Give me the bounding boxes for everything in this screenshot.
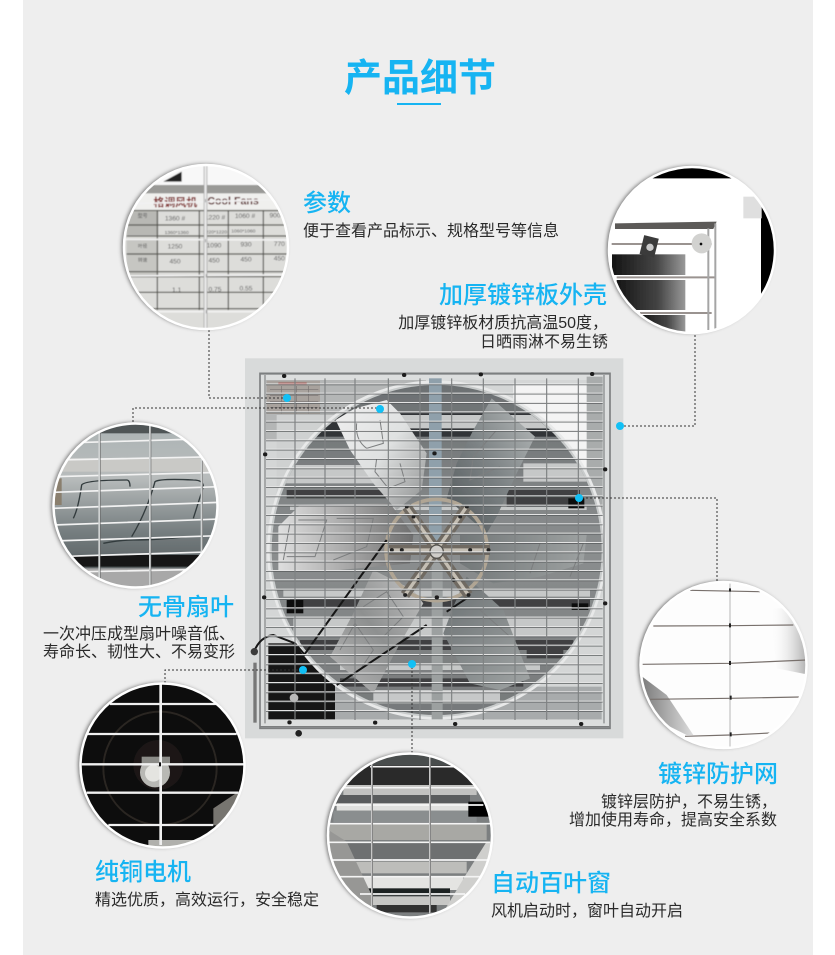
marker: motor bbox=[299, 666, 307, 674]
description: net: 镀锌层防护，不易生锈， bbox=[601, 793, 777, 811]
detail circle: blade bbox=[48, 420, 218, 590]
heading: motor: 纯铜电机 bbox=[95, 859, 191, 886]
detail circle: spec table: 1360 # bbox=[165, 215, 185, 222]
leader line: net bbox=[582, 498, 717, 582]
motor box dark corner bbox=[268, 643, 335, 719]
detail circle: spec table: 450 bbox=[208, 258, 220, 265]
detail circle: shell corner bbox=[600, 160, 780, 340]
detail circle: spec table: 叶径 bbox=[138, 242, 148, 249]
detail circle: spec table: 1090 bbox=[207, 243, 222, 250]
marker: shell bbox=[616, 422, 624, 430]
blade left bbox=[278, 503, 413, 571]
detail circle: spec table: 450 bbox=[240, 256, 252, 263]
marker: net bbox=[575, 494, 583, 502]
heading: shell: 加厚镀锌板外壳 bbox=[439, 282, 607, 309]
callout: automatic louver bbox=[320, 660, 683, 925]
leader line: shell bbox=[623, 335, 695, 426]
detail circle: spec table: 1220 # bbox=[205, 214, 225, 221]
description: blades: 一次冲压成型扇叶噪音低、 bbox=[43, 625, 235, 643]
detail circle: spec table: 1360*1360 bbox=[165, 230, 189, 236]
back louvers bbox=[270, 413, 603, 703]
marker: blades bbox=[376, 405, 384, 413]
fan outer galvanized frame bbox=[245, 358, 623, 738]
motor capacitor bbox=[290, 694, 298, 702]
detail circle: spec table: 450 bbox=[169, 258, 181, 265]
callout: galvanized shell bbox=[398, 160, 780, 430]
description: parameters: 便于查看产品标示、规格型号等信息 bbox=[303, 222, 559, 240]
detail circle: spec table: 转速 bbox=[138, 257, 148, 264]
detail circle: spec table: 1220*1220 bbox=[203, 229, 227, 235]
detail circle: spec table: 格调风机 bbox=[153, 195, 197, 209]
frame fittings bbox=[264, 374, 605, 724]
blade right bbox=[460, 535, 587, 583]
leader line: louver bbox=[411, 667, 413, 753]
callout: boneless blades bbox=[40, 405, 384, 661]
bottom frame hole bbox=[295, 730, 302, 737]
centre support bar bbox=[429, 378, 443, 719]
fan hub ring and spokes bbox=[386, 499, 490, 601]
description: motor: 精选优质，高效运行，安全稳定 bbox=[95, 891, 319, 909]
fan blades bbox=[278, 398, 587, 693]
detail circle: guard net bbox=[636, 578, 808, 750]
description: louver: 风机启动时，窗叶自动开启 bbox=[491, 902, 683, 920]
detail circle: spec table: 450 bbox=[274, 256, 285, 263]
description: shell: 加厚镀锌板材质抗高温50度， bbox=[398, 314, 608, 332]
callout: parameters bbox=[120, 160, 559, 402]
description line 2: blades: 寿命长、韧性大、不易变形 bbox=[43, 643, 235, 661]
wire grille bbox=[260, 374, 609, 727]
blade top-right bbox=[447, 398, 535, 533]
detail circle: spec table: 930 bbox=[240, 242, 252, 249]
heading: parameters: 参数 bbox=[303, 190, 351, 217]
detail circle: spec table: 1.1 bbox=[172, 287, 182, 294]
detail circle: spec table bbox=[120, 160, 290, 330]
blade bottom-left bbox=[330, 570, 423, 693]
fan frame inner area bbox=[260, 373, 610, 728]
cable grommet bbox=[251, 648, 258, 655]
heading: blades: 无骨扇叶 bbox=[138, 594, 234, 621]
title: 产品细节 bbox=[344, 58, 496, 100]
detail circle: spec table: 0.55 bbox=[240, 285, 253, 292]
title underline bbox=[397, 103, 441, 105]
detail circle: spec table: 900 bbox=[269, 212, 281, 219]
detail circle: spec table: 型号 bbox=[138, 212, 148, 219]
blade embossed ribs bbox=[283, 420, 583, 670]
fan body artwork bbox=[251, 373, 610, 737]
blade bottom-right bbox=[443, 577, 530, 690]
description line 2: shell: 日晒雨淋不易生锈 bbox=[480, 333, 608, 351]
marker: parameters bbox=[283, 394, 291, 402]
leader line: parameters bbox=[209, 330, 285, 398]
detail circle: spec table: 1250 bbox=[168, 244, 183, 251]
detail circle: spec table: 1060*1060 bbox=[231, 229, 256, 235]
power wires bbox=[254, 540, 467, 685]
description line 2: net: 增加使用寿命，提高安全系数 bbox=[569, 811, 777, 829]
blade top-left bbox=[336, 400, 427, 510]
detail circle: spec table: 1060 # bbox=[235, 213, 255, 220]
callout: copper motor bbox=[70, 666, 319, 909]
detail circle: spec table: 0.75 bbox=[209, 286, 222, 293]
heading: louver: 自动百叶窗 bbox=[491, 870, 611, 897]
detail circle: louver bbox=[323, 750, 493, 920]
marker: louver bbox=[408, 660, 416, 668]
detail circle: spec table: 770 bbox=[274, 241, 285, 248]
callout: galvanized guard net bbox=[569, 494, 815, 829]
leader line: motor bbox=[165, 670, 300, 683]
heading: net: 镀锌防护网 bbox=[658, 761, 778, 788]
spec label plate bbox=[267, 381, 320, 414]
detail circle: spec table: Cool Fans bbox=[207, 196, 259, 208]
detail circle: motor bbox=[76, 680, 246, 850]
fan circular housing bbox=[268, 382, 605, 718]
fan product illustration bbox=[245, 358, 623, 738]
side slot bbox=[253, 663, 257, 723]
leader line: blades bbox=[133, 408, 378, 422]
